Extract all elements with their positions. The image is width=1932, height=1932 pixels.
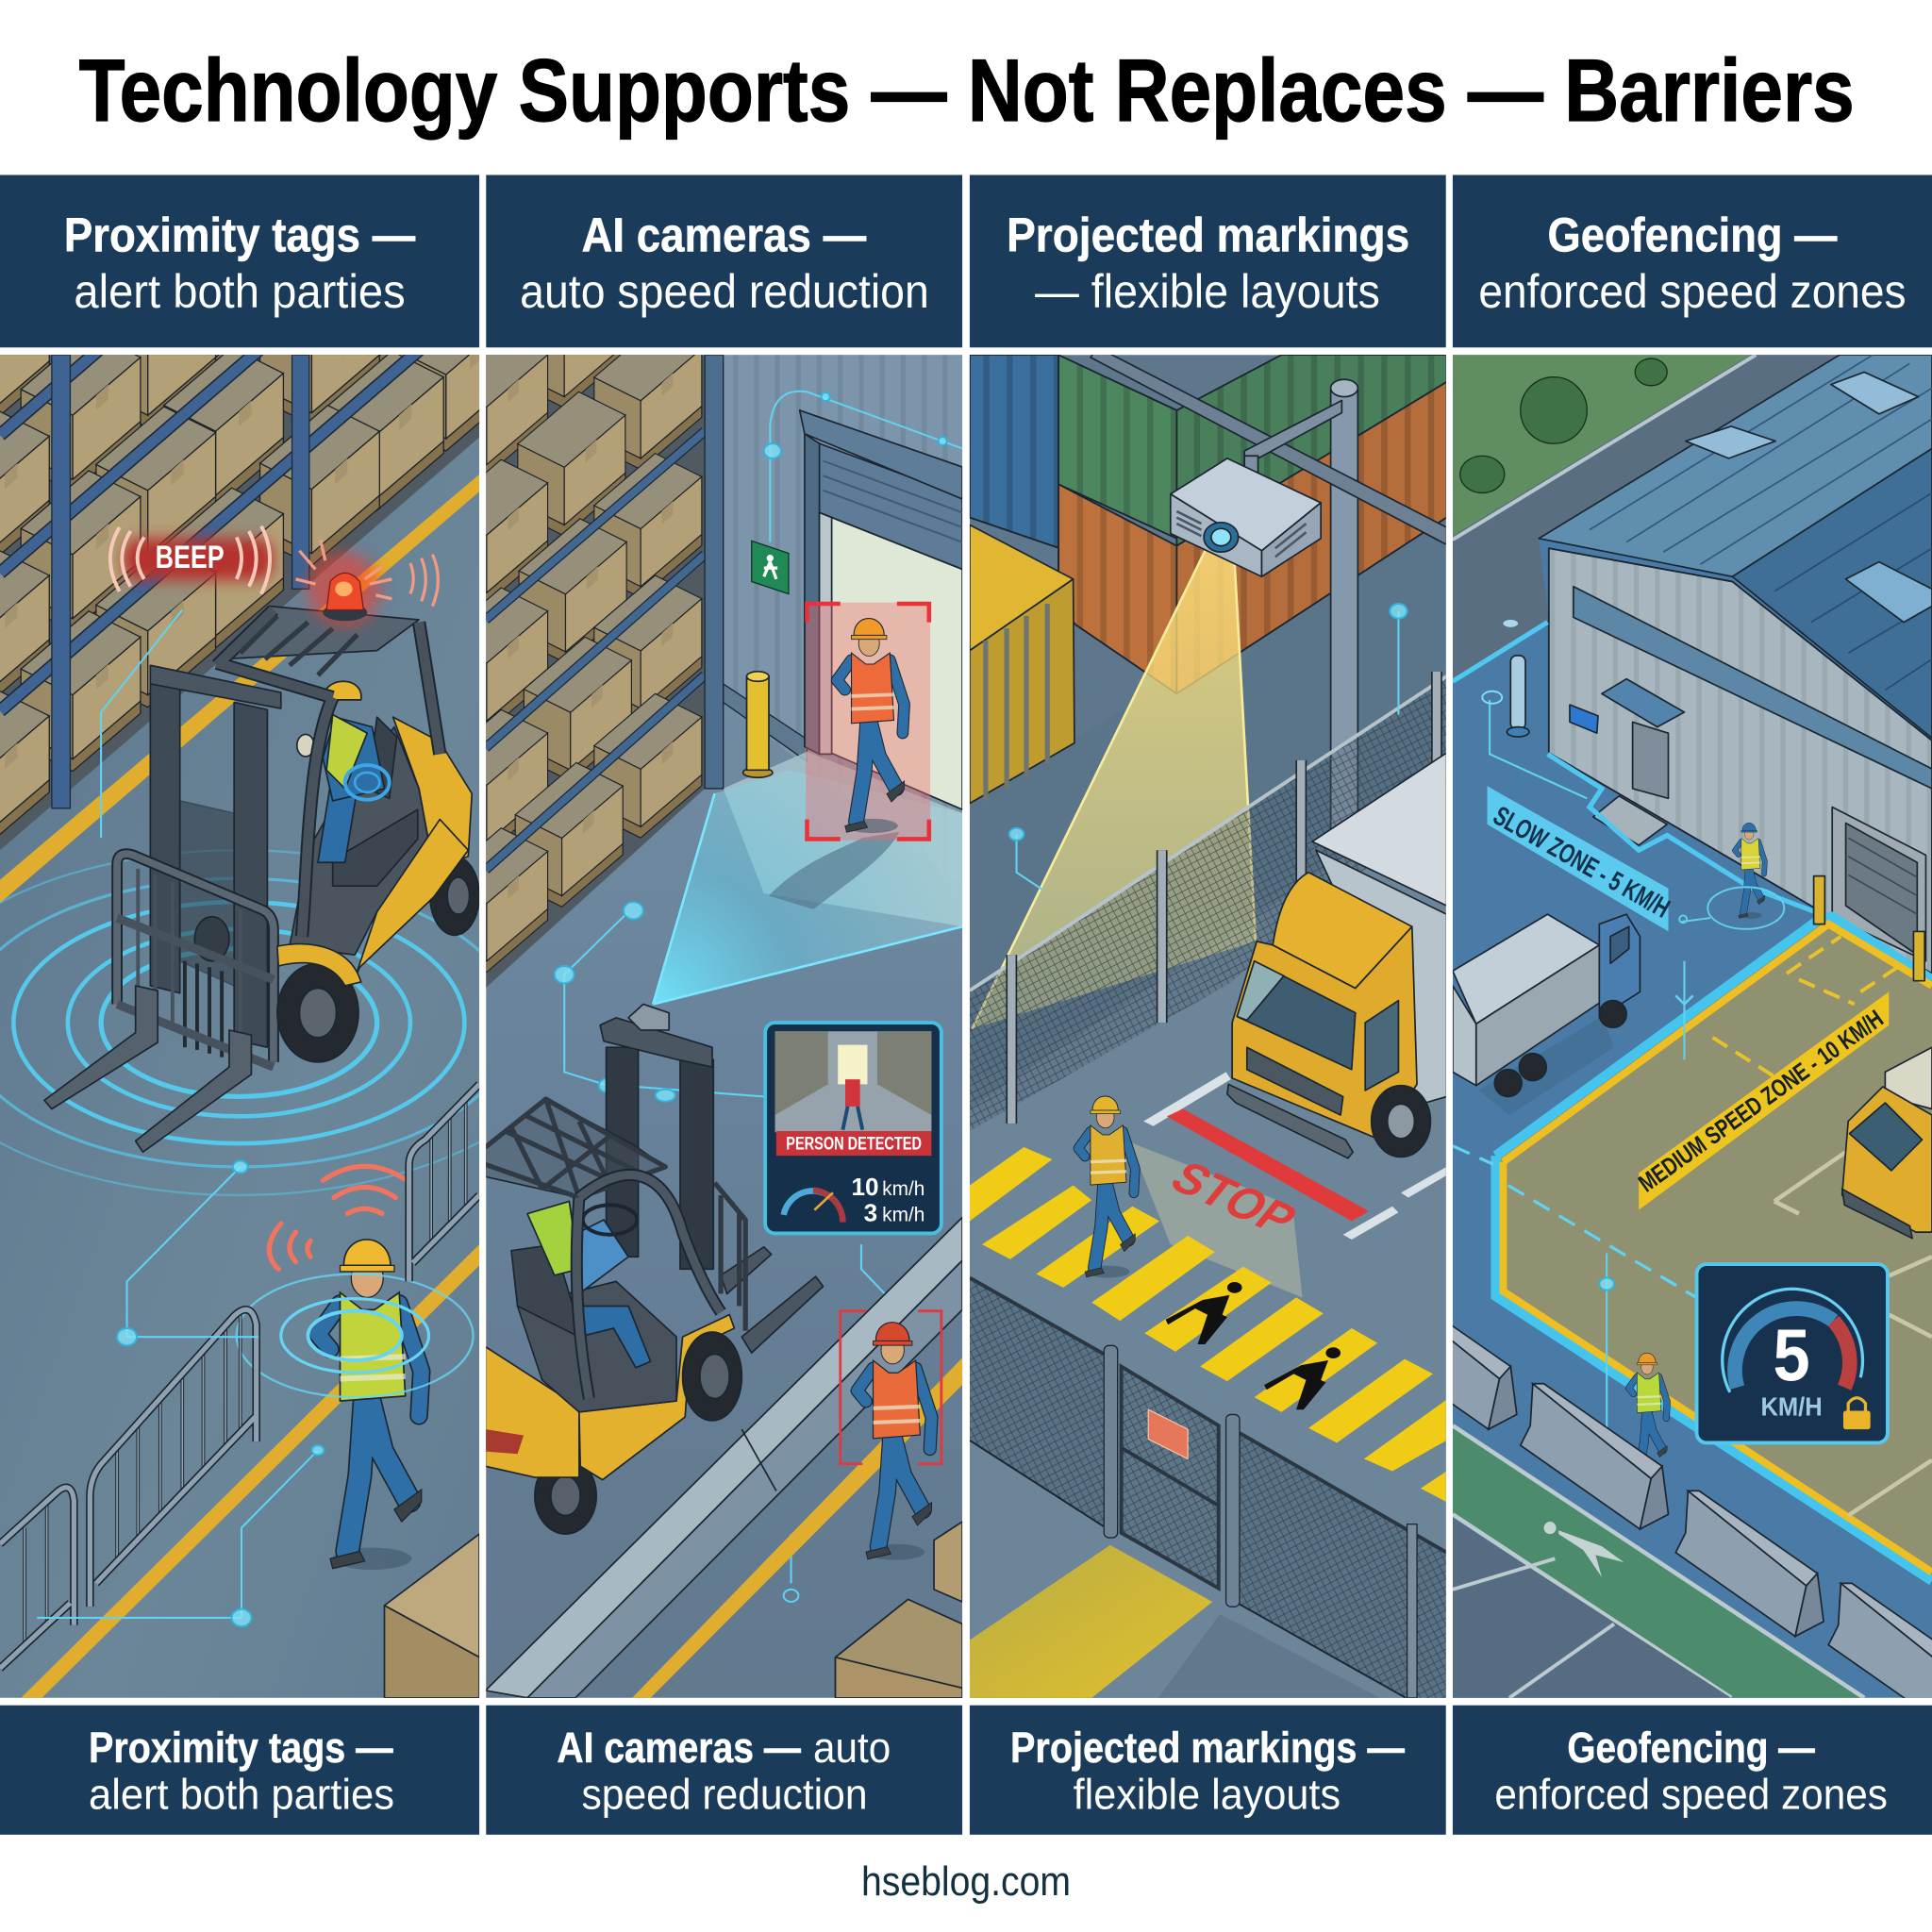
network lines <box>555 391 962 1602</box>
warehouse building <box>1539 355 1932 974</box>
warehouse wall <box>724 355 962 813</box>
worker with tag <box>318 1240 422 1570</box>
racking with boxes <box>486 355 724 988</box>
icon: projector <box>1171 458 1321 576</box>
cardboard box <box>385 1534 479 1698</box>
footer: projected markings: Projected markings — <box>1010 1724 1405 1772</box>
header: proximity tags: Proximity tags — <box>64 208 415 261</box>
panel: AI cameras scene <box>486 355 962 1698</box>
speed gauge panel: 5 <box>1774 1313 1810 1396</box>
truck <box>1227 753 1446 1158</box>
monitor panel: person detected: km/h <box>882 1178 924 1200</box>
warehouse racking with boxes <box>0 355 479 850</box>
forklift <box>44 607 479 1152</box>
footer: proximity tags <box>0 1706 479 1835</box>
yellow truck <box>1842 1047 1932 1239</box>
speed gauge panel <box>1697 1264 1888 1442</box>
beep signal: BEEP <box>156 540 225 575</box>
header: geofencing <box>1453 175 1932 347</box>
blue truck <box>1453 914 1640 1115</box>
footer: geofencing: enforced speed zones <box>1494 1770 1888 1818</box>
person shadow <box>769 832 899 909</box>
pole and gantry <box>1091 347 1446 832</box>
shipping containers <box>970 355 1446 804</box>
red wireless alerts <box>269 1166 407 1269</box>
yellow bollard <box>743 672 773 777</box>
bollard sensor <box>1507 656 1529 737</box>
camera vision cone <box>653 770 962 1004</box>
stop text: STOP <box>1160 1152 1307 1244</box>
floor stripe <box>632 1357 962 1698</box>
header: AI cameras: AI cameras — <box>581 208 866 261</box>
walkway worker <box>1629 1353 1667 1475</box>
worker geofence ring <box>1679 887 1784 929</box>
header: AI cameras <box>486 175 962 347</box>
header: projected markings: Projected markings <box>1007 208 1409 261</box>
detected worker <box>806 603 930 841</box>
footer: AI cameras: auto <box>813 1724 891 1772</box>
data connector lines <box>37 610 325 1626</box>
forklift with camera <box>486 1004 823 1534</box>
yellow floor stripe <box>0 475 479 903</box>
service road <box>1453 355 1840 681</box>
header: projected markings <box>970 175 1446 347</box>
icon: lock <box>1843 1398 1871 1429</box>
sensor connector <box>1482 620 1587 798</box>
header: geofencing: Geofencing — <box>1547 208 1837 261</box>
footer: geofencing: Geofencing — <box>1567 1724 1815 1772</box>
concrete barrier <box>486 1217 962 1698</box>
monitor panel: person detected: 3 <box>864 1198 877 1226</box>
tag rings around worker <box>237 1274 474 1397</box>
footer: AI cameras: speed reduction <box>581 1770 868 1818</box>
site credit: hseblog.com <box>861 1859 1071 1905</box>
geofence outline <box>1453 623 1815 912</box>
footer: AI cameras: AI cameras — <box>557 1724 801 1772</box>
walkway vertical connector <box>1599 961 1693 1436</box>
medium speed zone <box>1496 917 1932 1581</box>
shadow of fence <box>1158 1614 1380 1698</box>
header: proximity tags <box>0 175 479 347</box>
monitor panel: person detected: PERSON DETECTED <box>786 1135 922 1155</box>
zebra crossing <box>970 1147 1446 1502</box>
footer: proximity tags: alert both parties <box>89 1770 394 1818</box>
small walking worker <box>1735 823 1765 919</box>
monitor panel: person detected: 10 <box>852 1173 879 1201</box>
icons: pedestrian floor symbols <box>1166 1282 1341 1409</box>
monitor panel: person detected: km/h <box>882 1204 924 1225</box>
panel: geofencing scene <box>1369 355 1932 1728</box>
footer: geofencing <box>1453 1706 1932 1835</box>
header: projected markings: — flexible layouts <box>1035 265 1380 318</box>
monitor panel: person detected <box>765 1023 941 1233</box>
slow zone label <box>1487 786 1674 931</box>
walking worker <box>1078 1096 1135 1278</box>
yellow floor area <box>970 1545 1212 1698</box>
floor road markings <box>1130 1072 1446 1297</box>
icon: beacon light <box>295 540 438 626</box>
speed gauge panel: KM/H <box>1760 1392 1823 1422</box>
panel: proximity tags scene <box>0 355 479 1698</box>
barrier fences <box>0 1084 479 1668</box>
icon: exit sign <box>752 541 789 594</box>
panel: projected markings scene <box>970 347 1446 1698</box>
grass with bushes <box>1453 355 1751 536</box>
detection rings around forklift <box>0 849 479 1196</box>
footer: projected markings <box>970 1706 1446 1835</box>
footer: proximity tags: Proximity tags — <box>89 1724 393 1772</box>
footer: projected markings: flexible layouts <box>1074 1770 1341 1818</box>
light beam <box>973 551 1256 1029</box>
slow zone label: SLOW ZONE - 5 KM/H <box>1488 801 1674 924</box>
bollards <box>1814 876 1924 981</box>
footer: AI cameras <box>486 1706 962 1835</box>
header: AI cameras: auto speed reduction <box>520 265 929 318</box>
background fence <box>970 672 1446 1131</box>
concrete barriers <box>1369 1284 1932 1728</box>
dashed geofence line <box>1453 1146 1700 1300</box>
worker behind barrier <box>841 1311 941 1560</box>
lit floor in doorway <box>724 752 962 926</box>
medium speed zone label <box>1633 991 1889 1210</box>
connector nodes <box>1009 604 1407 890</box>
foreground chain-link fence and gate <box>970 1277 1446 1698</box>
header: proximity tags: alert both parties <box>74 265 406 318</box>
loading door <box>800 410 962 809</box>
green pedestrian walkway <box>1453 1425 1864 1698</box>
cardboard boxes <box>836 1522 962 1698</box>
header: geofencing: enforced speed zones <box>1478 265 1907 318</box>
beep signal <box>110 526 274 594</box>
